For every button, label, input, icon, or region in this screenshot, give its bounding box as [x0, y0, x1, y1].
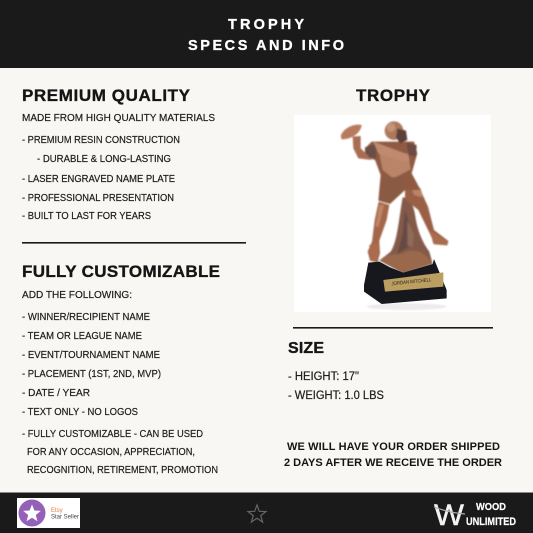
- panel: premium quality: - PROFESSIONAL PRESENTATION: [22, 192, 174, 204]
- panel: premium quality: MADE FROM HIGH QUALITY MATERIALS: [22, 112, 215, 124]
- header banner: [0, 0, 533, 68]
- panel: fully customizable: - WINNER/RECIPIENT NAME: [22, 311, 150, 323]
- back leg: [368, 202, 389, 263]
- panel: premium quality: - BUILT TO LAST FOR YEARS: [22, 210, 151, 222]
- panel: premium quality: - PREMIUM RESIN CONSTRUCTION: [22, 134, 180, 146]
- shipping note: [284, 441, 502, 469]
- shipping note: 2 DAYS AFTER WE RECEIVE THE ORDER: [284, 457, 502, 469]
- badge: etsy star seller: [17, 498, 80, 528]
- trophy image: [294, 115, 491, 312]
- panel: size: [288, 340, 384, 402]
- panel: fully customizable: - PLACEMENT (1ST, 2ND, MVP): [22, 368, 161, 380]
- panel: fully customizable: - FULLY CUSTOMIZABLE - CAN BE USED: [22, 428, 203, 440]
- header banner: SPECS AND INFO: [188, 38, 344, 54]
- shipping note: WE WILL HAVE YOUR ORDER SHIPPED: [287, 441, 500, 453]
- badge: etsy star seller: Etsy: [51, 508, 63, 514]
- panel: premium quality: [22, 86, 215, 222]
- panel: size: - WEIGHT: 1.0 LBS: [288, 390, 384, 402]
- panel: premium quality: PREMIUM QUALITY: [22, 86, 191, 105]
- panel: size: SIZE: [288, 340, 324, 357]
- panel: size: - HEIGHT: 17": [288, 371, 359, 383]
- panel: premium quality: - LASER ENGRAVED NAME PLATE: [22, 173, 175, 185]
- panel: fully customizable: ADD THE FOLLOWING:: [22, 289, 132, 301]
- logo: wood unlimited: W: [434, 499, 465, 532]
- torso and shorts: [364, 142, 421, 204]
- logo: wood unlimited: [434, 499, 516, 532]
- trophy image: JORDAN MITCHELL: [391, 277, 432, 287]
- boots: [369, 243, 378, 262]
- badge: etsy star seller: Star Seller: [51, 514, 79, 520]
- panel: fully customizable: - TEXT ONLY - NO LOGOS: [22, 406, 138, 418]
- arm and football: [353, 136, 372, 160]
- icon: star outline: [248, 505, 266, 522]
- panel: fully customizable: - EVENT/TOURNAMENT NAME: [22, 349, 160, 361]
- panel: fully customizable: - TEAM OR LEAGUE NAME: [22, 330, 142, 342]
- panel: premium quality: - DURABLE & LONG-LASTING: [37, 153, 171, 165]
- logo: wood unlimited: WOOD: [476, 501, 506, 513]
- header banner: TROPHY: [228, 17, 304, 33]
- front leg: [405, 185, 448, 245]
- rock: [379, 197, 433, 273]
- panel: fully customizable: - DATE / YEAR: [22, 387, 90, 399]
- panel: fully customizable: [22, 262, 220, 476]
- helmet: [385, 121, 403, 140]
- heading: trophy: TROPHY: [356, 86, 431, 105]
- panel: fully customizable: RECOGNITION, RETIREMENT, PROMOTION: [27, 464, 218, 476]
- plate: [383, 272, 443, 292]
- logo: wood unlimited: UNLIMITED: [466, 516, 516, 528]
- black base: [364, 259, 447, 304]
- footer: [0, 492, 533, 533]
- panel: fully customizable: FULLY CUSTOMIZABLE: [22, 262, 220, 281]
- panel: fully customizable: FOR ANY OCCASION, APPRECIATION,: [27, 446, 195, 458]
